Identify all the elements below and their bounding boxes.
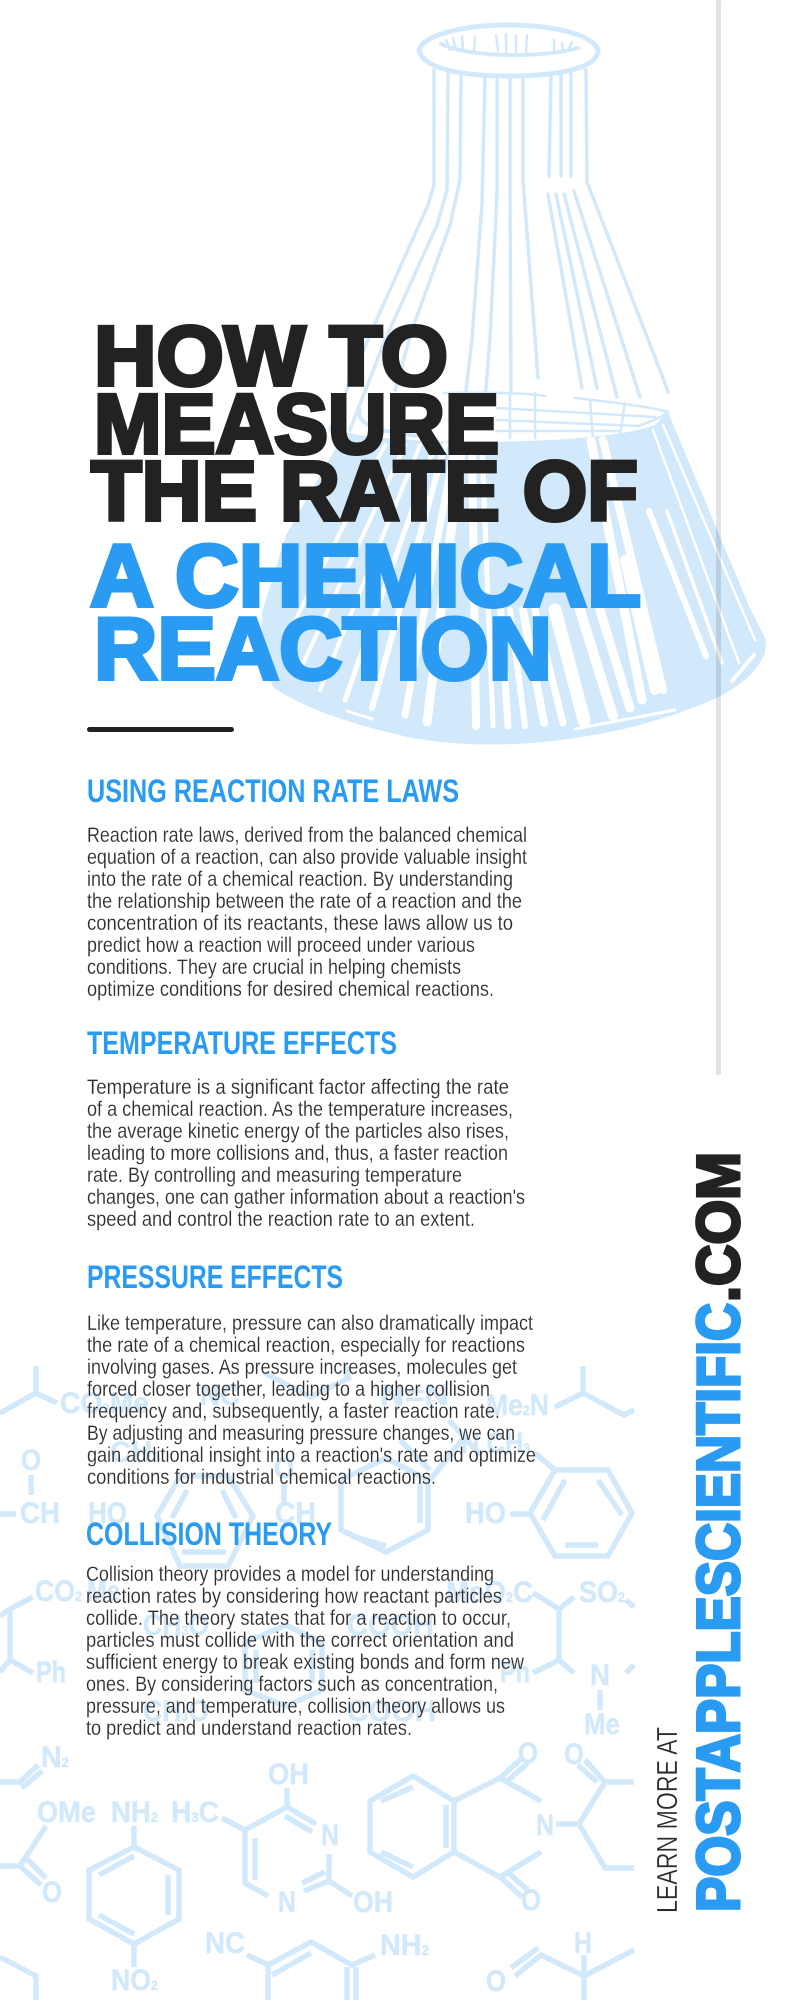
body text: the rate of a chemical reaction, especially for reactions — [87, 1334, 525, 1357]
molecule labels: HO — [465, 1497, 506, 1530]
body text: particles must collide with the correct orientation and — [86, 1629, 514, 1652]
molecule labels: N — [590, 1659, 610, 1692]
body text: involving gases. As pressure increases, molecules get — [87, 1356, 517, 1379]
molecule labels: CO2Me — [60, 1387, 149, 1420]
molecule labels: NC — [200, 1379, 240, 1412]
molecule labels: CH — [275, 1497, 316, 1530]
body text: collide. The theory states that for a reaction to occur, — [86, 1607, 511, 1630]
illustration: Erlenmeyer flask — [260, 25, 766, 744]
molecule labels: H3C — [171, 1796, 219, 1829]
molecule labels: N — [536, 1809, 554, 1842]
body text — [87, 824, 527, 1001]
molecule labels: N — [278, 1886, 296, 1919]
molecule labels: O — [486, 1965, 506, 1998]
title — [90, 309, 641, 698]
body text: into the rate of a chemical reaction. By understanding — [87, 868, 513, 891]
divider rule — [87, 727, 234, 732]
body text: reaction rates by considering how reactant particles — [86, 1585, 502, 1608]
flask neck and shoulder lines — [330, 70, 668, 430]
molecule labels: OH — [353, 1886, 393, 1919]
molecule labels: OMe — [37, 1796, 96, 1829]
body text: the average kinetic energy of the particles also rises, — [87, 1120, 509, 1143]
molecule labels: NH2 — [111, 1796, 158, 1829]
molecule labels: NC — [205, 1927, 245, 1960]
molecule labels: CO2 — [35, 1575, 82, 1608]
body text: to predict and understand reaction rates. — [86, 1717, 412, 1740]
liquid highlights — [285, 425, 755, 729]
molecule labels: CH3O — [143, 1609, 209, 1642]
body text: Like temperature, pressure can also dramatically impact — [87, 1312, 533, 1335]
molecule labels: MeO2C — [446, 1576, 533, 1609]
body text: predict how a reaction will proceed under various — [87, 934, 475, 957]
body text: Collision theory provides a model for understanding — [86, 1563, 494, 1586]
molecule labels: COOH — [347, 1609, 434, 1642]
body text: sufficient energy to break existing bonds and form new — [86, 1651, 525, 1674]
body text: changes, one can gather information about a reaction's — [87, 1186, 525, 1209]
heading: USING REACTION RATE LAWS — [87, 773, 459, 809]
molecule labels: Me — [584, 1708, 620, 1741]
learn more label: LEARN MORE AT — [652, 1727, 684, 1913]
section: pressure effects — [87, 1259, 536, 1489]
website url: .COM — [685, 1152, 752, 1302]
molecule labels: O — [274, 1452, 294, 1485]
call to action: vertical website text — [652, 1152, 752, 1913]
body text: leading to more collisions and, thus, a faster reaction — [87, 1142, 508, 1165]
decorative vertical bar — [716, 0, 721, 1075]
body text: concentration of its reactants, these laws allow us to — [87, 912, 513, 935]
molecule labels: NH2 — [380, 1929, 429, 1962]
body text — [87, 1312, 536, 1489]
heading: COLLISION THEORY — [86, 1516, 332, 1552]
molecule labels: Me — [87, 1575, 120, 1608]
molecule labels: OH — [268, 1758, 309, 1791]
body text: conditions for industrial chemical reactions. — [87, 1466, 436, 1489]
body text: forced closer together, leading to a higher collision — [87, 1378, 490, 1401]
molecule labels: O — [564, 1738, 584, 1771]
molecule labels: N=N — [380, 1379, 449, 1412]
molecule labels: N2 — [41, 1741, 69, 1774]
molecule labels: CH3O — [143, 1695, 209, 1728]
body text: frequency and, subsequently, a faster reaction rate. — [87, 1400, 500, 1423]
title: THE RATE OF — [91, 444, 638, 538]
molecule labels: CH — [20, 1497, 60, 1530]
website url: POSTAPPLESCIENTIFIC — [685, 1303, 752, 1912]
body text: equation of a reaction, can also provide valuable insight — [87, 846, 527, 869]
molecule labels: O — [42, 1876, 62, 1909]
section: using reaction rate laws — [87, 773, 527, 1001]
body text: optimize conditions for desired chemical reactions. — [87, 978, 494, 1001]
molecule labels: N CH3 — [461, 1427, 530, 1460]
molecule labels: N — [321, 1819, 339, 1852]
flask liquid body — [260, 412, 766, 744]
molecule labels: Me2N — [486, 1389, 549, 1422]
body text: Temperature is a significant factor affecting the rate — [87, 1076, 509, 1099]
liquid surface lines — [359, 393, 668, 438]
heading: PRESSURE EFFECTS — [87, 1259, 343, 1295]
molecule labels: Ph — [36, 1656, 66, 1689]
body text: By adjusting and measuring pressure changes, we can — [87, 1422, 515, 1445]
molecule labels: O — [21, 1444, 41, 1477]
body text: pressure, and temperature, collision theory allows us — [86, 1695, 505, 1718]
molecule labels: HO — [88, 1497, 127, 1530]
body text: conditions. They are crucial in helping chemists — [87, 956, 461, 979]
molecule labels: SO2 — [579, 1576, 625, 1609]
molecule bonds and rings — [0, 1366, 634, 2000]
body text — [87, 1076, 525, 1231]
flask rim — [419, 25, 598, 76]
section: collision theory — [86, 1516, 525, 1740]
molecule labels: Ph — [500, 1656, 530, 1689]
molecule labels: O — [521, 1884, 541, 1917]
molecule labels: H — [574, 1927, 592, 1960]
body text — [86, 1563, 525, 1740]
molecule labels: NO2 — [111, 1964, 158, 1997]
molecule labels — [20, 1379, 625, 1998]
body text: the relationship between the rate of a reaction and the — [87, 890, 522, 913]
body text: speed and control the reaction rate to an extent. — [87, 1208, 475, 1231]
title: HOW TO — [94, 309, 448, 403]
title: REACTION — [94, 599, 552, 698]
section: temperature effects — [87, 1025, 525, 1231]
body text: rate. By controlling and measuring temperature — [87, 1164, 462, 1187]
title: A CHEMICAL — [90, 526, 641, 625]
body text: Reaction rate laws, derived from the balanced chemical — [87, 824, 527, 847]
body text: ones. By considering factors such as concentration, — [86, 1673, 498, 1696]
title: MEASURE — [94, 377, 499, 471]
molecule labels: O — [518, 1737, 538, 1770]
molecule labels: COOH — [347, 1695, 436, 1728]
body text: of a chemical reaction. As the temperature increases, — [87, 1098, 513, 1121]
background: molecule formulas — [0, 1366, 634, 2000]
heading: TEMPERATURE EFFECTS — [87, 1025, 397, 1061]
molecule labels: CH3 — [110, 1436, 160, 1469]
body text: gain additional insight into a reaction's rate and optimize — [87, 1444, 536, 1467]
